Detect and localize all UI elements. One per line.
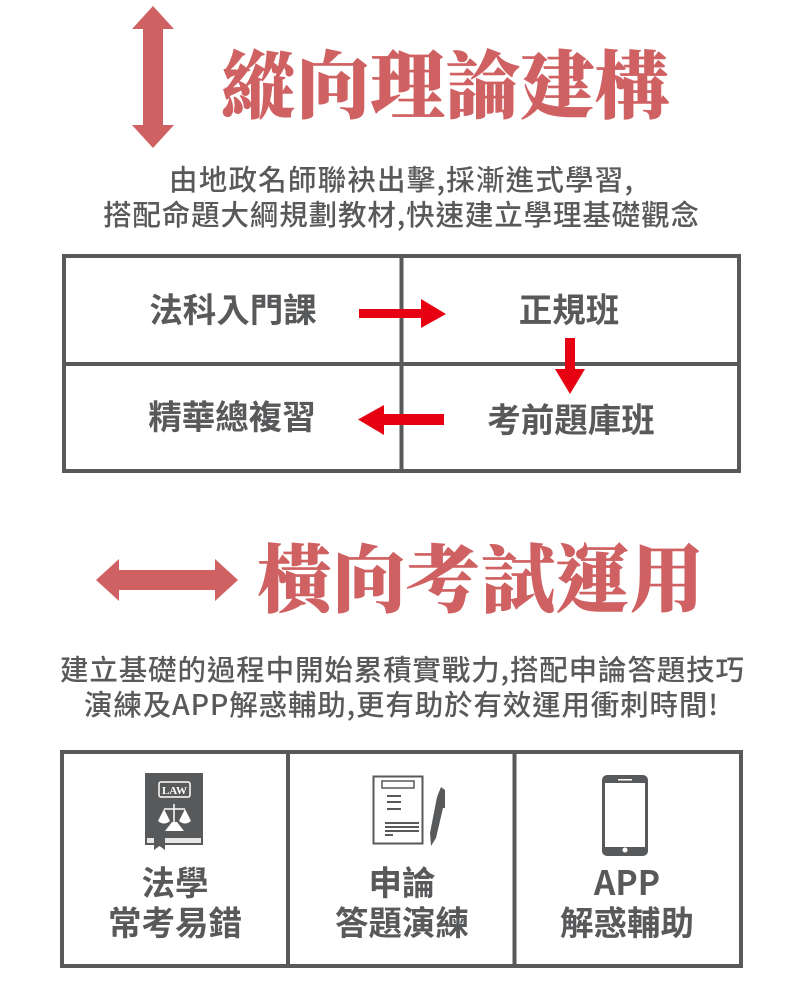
text block: vertical intro: 由地政名師聯袂出擊,採漸進式學習,: [169, 158, 633, 199]
label: law pitfalls: 常考易錯: [108, 896, 242, 945]
text block: horizontal intro: 演練及APP解惑輔助,更有助於有效運用衝刺時間!: [84, 683, 718, 724]
icon: smartphone: [602, 775, 648, 856]
arrow: right: [359, 299, 446, 328]
label: app support: APP: [593, 856, 660, 905]
label: final review: 精華總複習: [148, 390, 316, 439]
title: horizontal application: 橫向考試運用: [257, 522, 704, 628]
text block: horizontal intro: [60, 648, 744, 724]
arrow: left: [358, 405, 444, 435]
label: law pitfalls: 法學: [142, 856, 208, 905]
icon: horizontal double arrow: [96, 559, 238, 601]
icon: document and pen: [374, 776, 445, 846]
icon: vertical double arrow: [132, 6, 174, 148]
text block: horizontal intro: 建立基礎的過程中開始累積實戰力,搭配申論答題技巧: [60, 648, 744, 689]
label: app support: [560, 856, 694, 945]
label: app support: 解惑輔助: [560, 896, 694, 945]
label: intro course: 法科入門課: [149, 283, 317, 332]
label: law pitfalls: [108, 856, 242, 945]
label: question bank class: 考前題庫班: [487, 393, 655, 442]
text block: vertical intro: [103, 158, 699, 234]
icon: law book: [145, 773, 203, 850]
icon: law book: LAW: [162, 785, 187, 797]
label: essay practice: 答題演練: [335, 896, 469, 945]
label: essay practice: [335, 856, 469, 945]
text block: vertical intro: 搭配命題大綱規劃教材,快速建立學理基礎觀念: [103, 193, 699, 234]
title: vertical theory: 縱向理論建構: [221, 28, 669, 134]
arrow: down: [555, 338, 585, 394]
panel: course flow: [64, 256, 739, 471]
panel: three features: [62, 752, 741, 966]
label: essay practice: 申論: [368, 856, 436, 905]
label: regular class: 正規班: [519, 283, 619, 332]
